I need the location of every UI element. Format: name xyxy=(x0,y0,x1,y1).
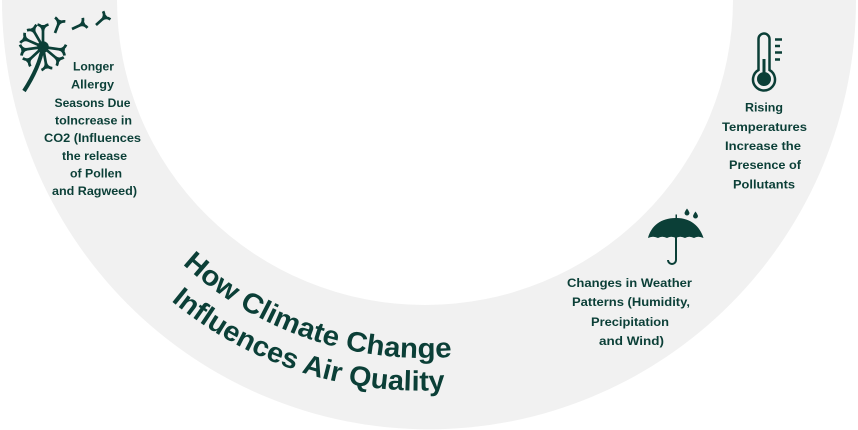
text: rising temperatures: Increase the xyxy=(725,139,801,153)
text: rising temperatures: Rising xyxy=(745,100,783,114)
title: Influences Air Quality xyxy=(172,287,444,396)
text: longer allergy seasons xyxy=(44,60,141,198)
text: changes in weather: and Wind) xyxy=(599,334,664,348)
text: changes in weather: Patterns (Humidity, xyxy=(572,295,690,309)
text: rising temperatures: Pollutants xyxy=(733,178,795,192)
text: longer allergy seasons: Seasons Due xyxy=(54,96,131,110)
text: longer allergy seasons: Longer xyxy=(73,60,114,74)
text: longer allergy seasons: and Ragweed) xyxy=(52,184,137,198)
icon: umbrella xyxy=(648,208,704,264)
text: rising temperatures xyxy=(722,100,807,192)
title: How Climate Change xyxy=(184,251,451,364)
text: longer allergy seasons: the release xyxy=(62,149,127,163)
text: changes in weather: Precipitation xyxy=(591,315,669,329)
icon: thermometer xyxy=(753,34,782,91)
text: longer allergy seasons: Allergy xyxy=(71,78,114,92)
text: longer allergy seasons: of Pollen xyxy=(70,166,122,180)
text: longer allergy seasons: toIncrease in xyxy=(55,114,132,128)
text: rising temperatures: Presence of xyxy=(729,158,802,172)
text: changes in weather xyxy=(567,276,692,348)
text: changes in weather: Changes in Weather xyxy=(567,276,692,290)
text: rising temperatures: Temperatures xyxy=(722,120,807,134)
text: longer allergy seasons: CO2 (Influences xyxy=(44,131,141,145)
icon: dandelion xyxy=(20,11,110,91)
